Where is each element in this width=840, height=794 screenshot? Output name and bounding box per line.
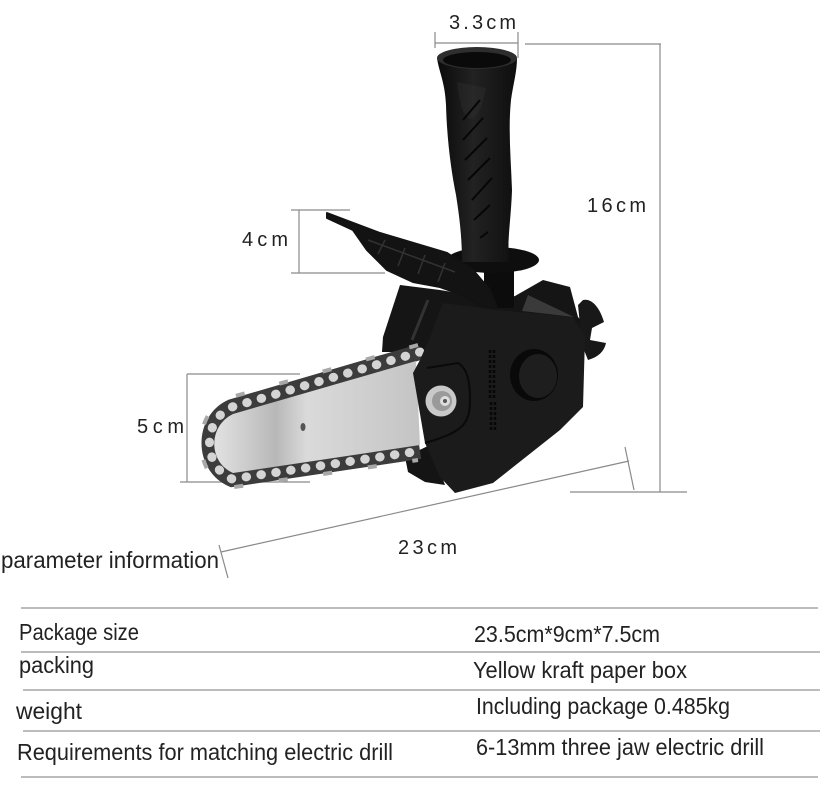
row: package size	[19, 619, 660, 647]
hand guard	[327, 213, 497, 308]
chain	[201, 345, 420, 488]
dimension: bar width 5cm	[137, 374, 310, 482]
rear housing	[382, 280, 590, 360]
dimension: height 16cm	[525, 44, 687, 492]
embossed plate marking	[490, 350, 495, 432]
side plate	[413, 303, 585, 493]
bar hole	[300, 423, 306, 431]
product: mini chainsaw attachment	[201, 47, 606, 493]
dimension: handle width 3.3cm: 3.3cm	[449, 12, 516, 34]
parameter table	[15, 608, 820, 777]
guide bar	[214, 361, 420, 473]
row: packing: packing	[19, 652, 94, 678]
dimension: height 16cm: 16cm	[587, 195, 646, 217]
dimension: handle width 3.3cm	[435, 12, 518, 58]
section heading: parameter information	[1, 547, 219, 573]
row: weight: weight	[15, 698, 82, 724]
lower housing	[405, 445, 445, 485]
row: package size: 23.5cm*9cm*7.5cm	[474, 621, 660, 647]
dimension: length 23cm	[219, 447, 634, 578]
dimension: guard height 4cm	[242, 210, 385, 273]
row: drill requirements: 6-13mm three jaw electric drill	[476, 734, 764, 760]
dimension: bar width 5cm: 5cm	[137, 416, 184, 438]
connector lugs	[578, 300, 606, 360]
row: drill requirements: Requirements for matching electric drill	[17, 739, 393, 765]
dimension: length 23cm: 23cm	[398, 537, 457, 559]
handle	[437, 47, 539, 308]
row: weight: Including package 0.485kg	[476, 693, 730, 719]
dimension: guard height 4cm: 4cm	[242, 229, 288, 251]
row: packing: Yellow kraft paper box	[473, 657, 687, 683]
bolt	[426, 386, 456, 416]
row: package size: Package size	[19, 619, 139, 645]
row: drill requirements	[17, 734, 764, 765]
row: packing	[19, 652, 687, 683]
round button	[510, 349, 558, 401]
row: weight	[15, 693, 730, 724]
